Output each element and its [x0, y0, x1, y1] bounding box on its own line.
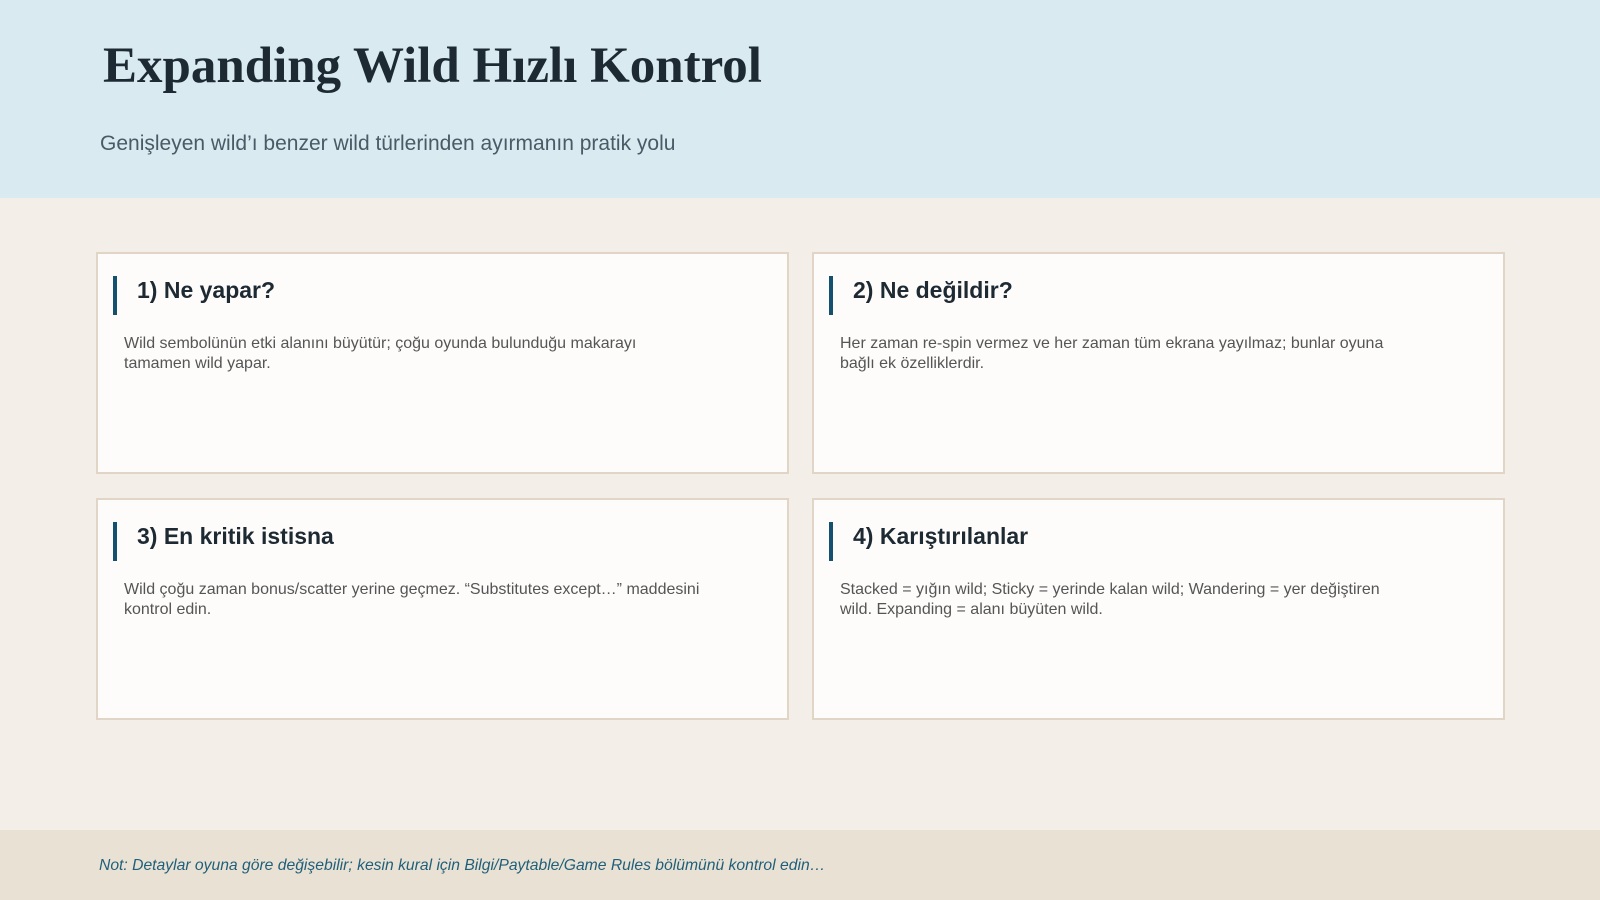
- footer: [0, 830, 1600, 900]
- subtitle: Genişleyen wild’ı benzer wild türlerinden ayırmanın pratik yolu: [100, 132, 675, 155]
- panel: ne yapar: [96, 252, 789, 474]
- panel: istisna: [96, 498, 789, 720]
- title: Expanding Wild Hızlı Kontrol: [103, 38, 762, 94]
- text: Her zaman re-spin vermez ve her zaman tüm ekrana yayılmaz; bunlar oyuna bağlı ek özelliklerdir.: [840, 335, 1383, 372]
- heading: 4) Karıştırılanlar: [853, 523, 1028, 549]
- heading: 2) Ne değildir?: [853, 277, 1013, 303]
- panel: karıştırılanlar: [812, 498, 1505, 720]
- panel: ne değildir: [812, 252, 1505, 474]
- heading: 1) Ne yapar?: [137, 277, 275, 303]
- heading: 3) En kritik istisna: [137, 523, 334, 549]
- text: Wild çoğu zaman bonus/scatter yerine geçmez. “Substitutes except…” maddesini kontrol edin.: [124, 581, 699, 618]
- text: Wild sembolünün etki alanını büyütür; çoğu oyunda bulunduğu makarayı tamamen wild yapar.: [124, 335, 636, 372]
- text: Stacked = yığın wild; Sticky = yerinde kalan wild; Wandering = yer değiştiren wild. Expanding = alanı büyüten wild.: [840, 581, 1380, 618]
- footer note: Not: Detaylar oyuna göre değişebilir; kesin kural için Bilgi/Paytable/Game Rules bölümünü kontrol edin…: [99, 857, 825, 874]
- header band: [0, 0, 1600, 198]
